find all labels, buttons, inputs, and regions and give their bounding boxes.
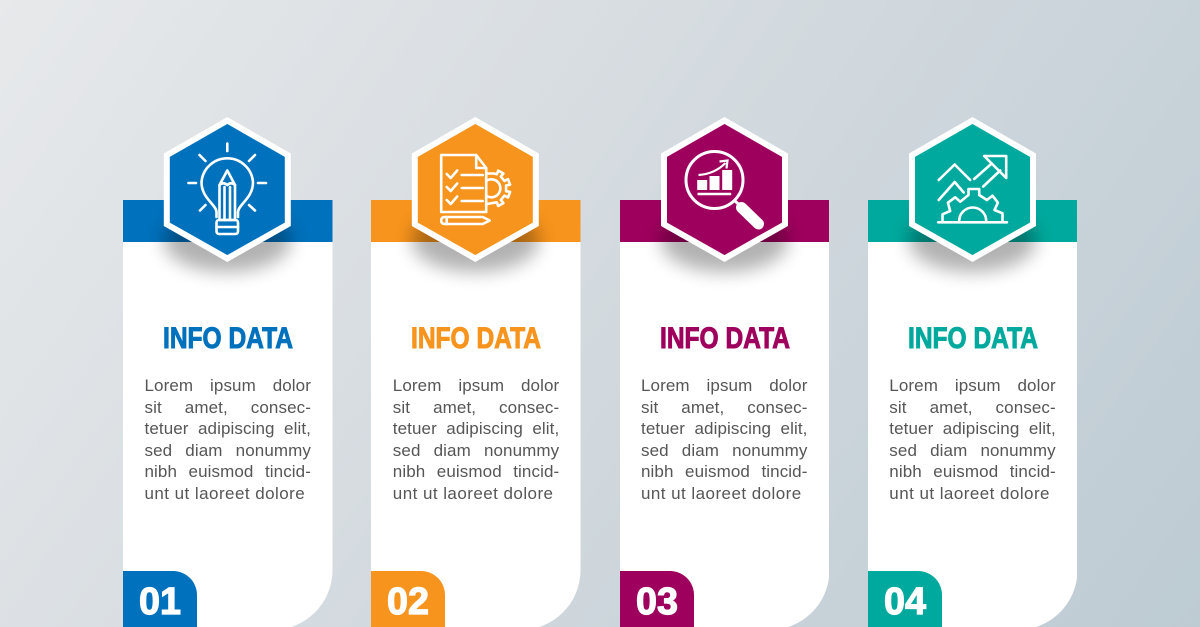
- colour band: [123, 200, 332, 242]
- panel: card 02: [371, 117, 580, 627]
- panel: card 01: [123, 117, 332, 627]
- hexagon badge: [167, 120, 288, 258]
- body text: unt ut laoreet dolore: [144, 484, 305, 503]
- body text: sit amet, consec-: [144, 398, 311, 417]
- hexagon shadow: [660, 208, 788, 272]
- body text: tetuer adipiscing elit,: [393, 419, 559, 438]
- body text: Lorem ipsum dolor: [641, 376, 808, 395]
- heading: INFO DATA: [660, 322, 790, 355]
- body text: nibh euismod tincid-: [393, 462, 559, 481]
- body text: [889, 376, 1056, 503]
- number tab: 02: [387, 581, 429, 623]
- card white body: [123, 242, 333, 627]
- number tab: [620, 571, 694, 627]
- icon: gear with rising arrow: [938, 156, 1007, 222]
- body text: Lorem ipsum dolor: [393, 376, 559, 395]
- hexagon badge: [415, 120, 536, 258]
- panel: card 03: [620, 117, 829, 627]
- card white body: [371, 242, 581, 627]
- colour band: [371, 200, 581, 242]
- body text: Lorem ipsum dolor: [889, 376, 1056, 395]
- body text: sed diam nonummy: [889, 441, 1056, 460]
- number tab: 04: [884, 581, 926, 623]
- hexagon badge: [664, 120, 784, 258]
- body text: [641, 376, 808, 503]
- hexagon shadow: [412, 208, 540, 272]
- body text: sit amet, consec-: [889, 398, 1056, 417]
- body text: nibh euismod tincid-: [641, 462, 808, 481]
- body text: tetuer adipiscing elit,: [641, 419, 808, 438]
- body text: tetuer adipiscing elit,: [889, 419, 1056, 438]
- hexagon shadow: [908, 208, 1036, 272]
- icon: checklist with gear and pencil: [441, 155, 510, 224]
- body text: tetuer adipiscing elit,: [144, 419, 311, 438]
- heading: INFO DATA: [163, 322, 293, 355]
- body text: [144, 376, 311, 503]
- card white body: [868, 242, 1077, 627]
- icon: magnifier with growth chart: [686, 152, 758, 224]
- body text: unt ut laoreet dolore: [641, 484, 802, 503]
- body text: nibh euismod tincid-: [889, 462, 1056, 481]
- colour band: [620, 200, 829, 242]
- hexagon shadow: [163, 208, 291, 272]
- body text: sit amet, consec-: [641, 398, 808, 417]
- heading: INFO DATA: [908, 322, 1038, 355]
- number tab: [868, 571, 942, 627]
- body text: sit amet, consec-: [393, 398, 559, 417]
- number tab: 03: [636, 581, 678, 623]
- colour band: [868, 200, 1077, 242]
- icon: light bulb with pencil: [188, 144, 266, 234]
- hexagon badge: [912, 120, 1033, 258]
- number tab: 01: [139, 581, 181, 623]
- body text: sed diam nonummy: [641, 441, 808, 460]
- panel: card 04: [868, 117, 1077, 627]
- body text: sed diam nonummy: [144, 441, 311, 460]
- body text: nibh euismod tincid-: [144, 462, 311, 481]
- heading: INFO DATA: [411, 322, 541, 355]
- body text: [393, 376, 559, 503]
- card white body: [620, 242, 829, 627]
- body text: sed diam nonummy: [393, 441, 559, 460]
- body text: Lorem ipsum dolor: [144, 376, 311, 395]
- body text: unt ut laoreet dolore: [393, 484, 553, 503]
- body text: unt ut laoreet dolore: [889, 484, 1050, 503]
- number tab: [371, 571, 445, 627]
- number tab: [123, 571, 197, 627]
